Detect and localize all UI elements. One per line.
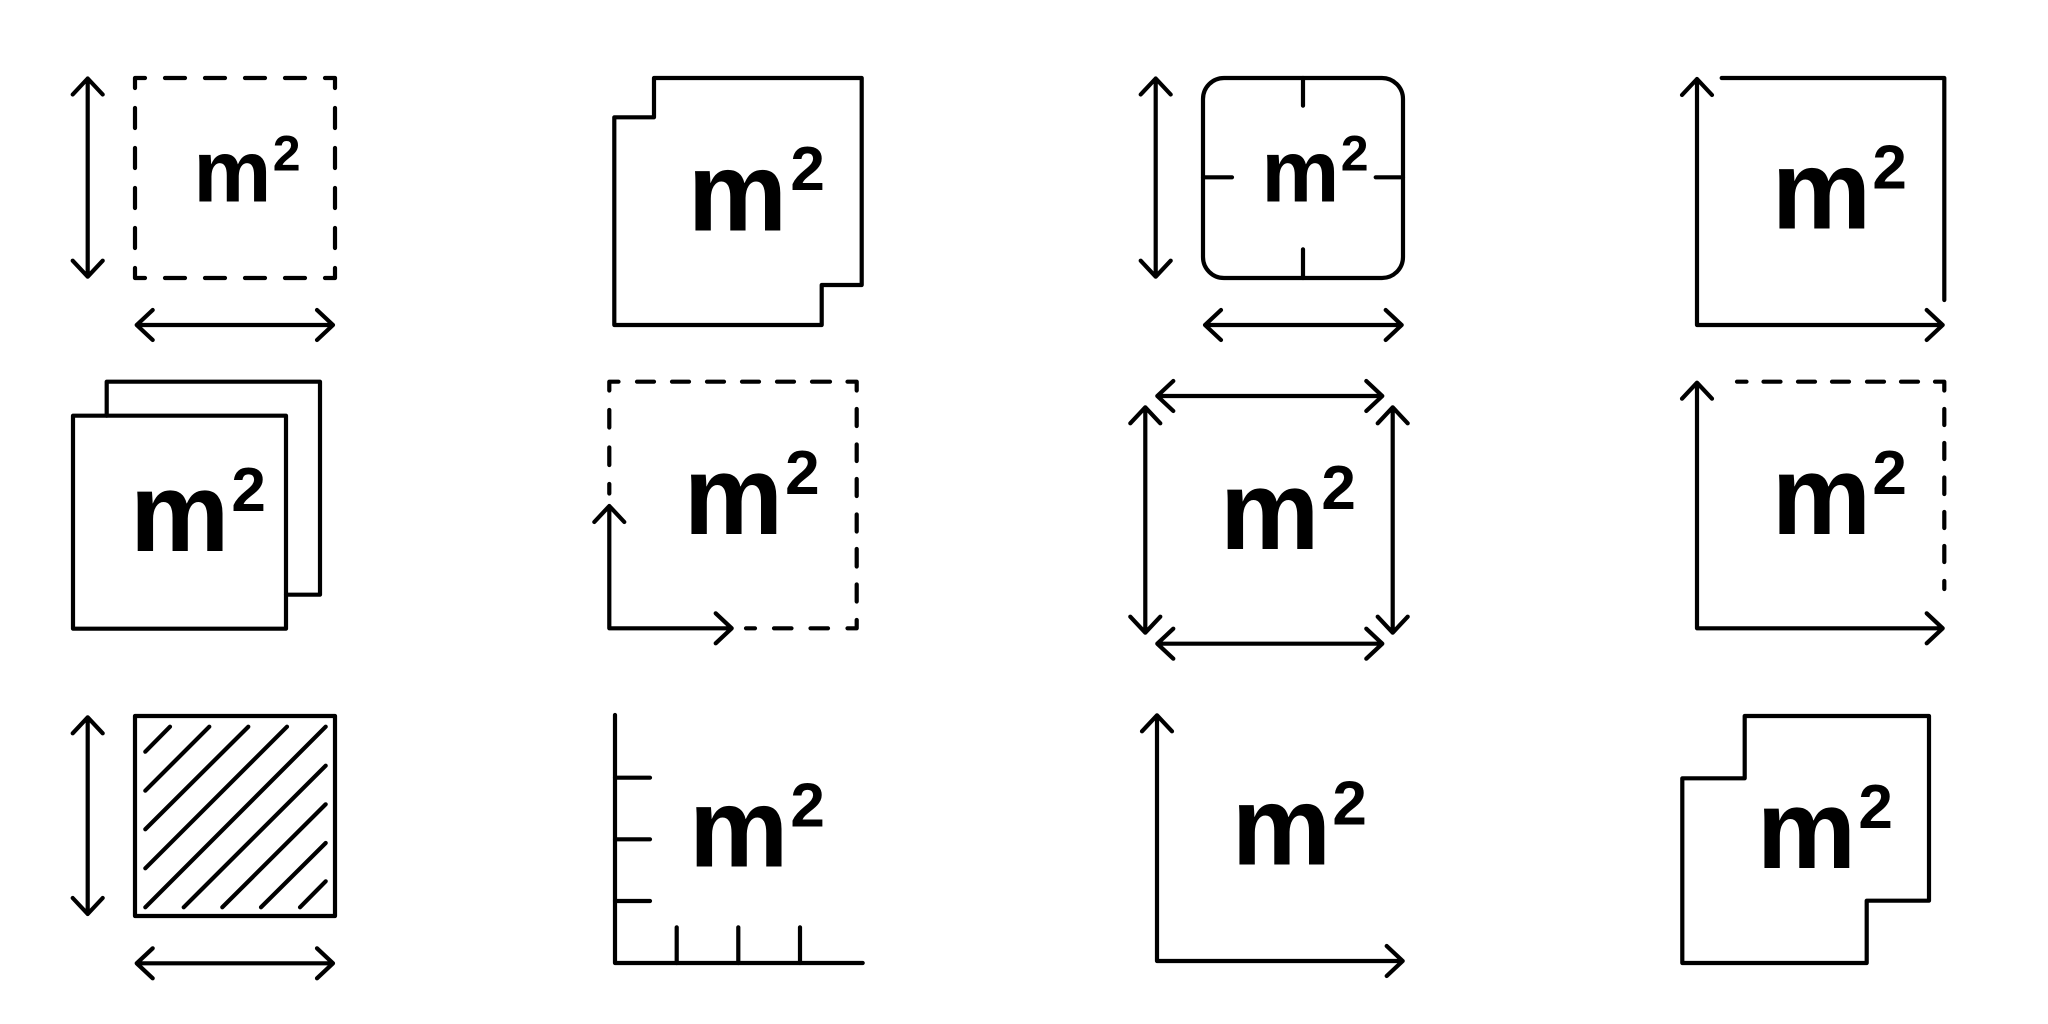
- square: [135, 716, 335, 916]
- label m2: m: [1757, 767, 1856, 892]
- corner arrows: [594, 506, 732, 643]
- centre ticks: [1203, 78, 1403, 278]
- label m2: m: [193, 122, 271, 221]
- label m2: 2: [790, 772, 825, 841]
- axis arrows: [1682, 383, 1943, 643]
- horizontal double arrow: [137, 310, 333, 340]
- rounded square: [1203, 78, 1403, 278]
- label m2: 2: [1858, 773, 1893, 842]
- icon: four double arrows forming a square: [1130, 381, 1408, 659]
- horizontal double arrow: [1205, 310, 1402, 340]
- front square: [73, 416, 286, 629]
- label m2: m: [1261, 122, 1339, 221]
- label m2: 2: [790, 135, 825, 204]
- label m2: 2: [785, 439, 820, 508]
- dashed outline: [609, 382, 857, 628]
- dashed outline: [1737, 382, 1944, 589]
- horizontal double arrow: [137, 948, 333, 978]
- vertical double arrow: [73, 78, 103, 277]
- label m2: 2: [273, 126, 301, 182]
- icon: hatched square with width and height arrows: [73, 716, 335, 978]
- label m2: m: [688, 129, 787, 254]
- label m2: m: [1220, 448, 1319, 573]
- label m2: m: [1772, 127, 1871, 252]
- icon: plain axis arrows: [1142, 715, 1403, 976]
- icon: axis arrows with dashed outline: [1682, 382, 1944, 643]
- floor plan outline: [1682, 716, 1929, 963]
- back square: [107, 382, 320, 595]
- ticks: [615, 778, 800, 963]
- left arrow: [1130, 407, 1160, 633]
- label m2: m: [689, 766, 788, 891]
- diagonal hatching: [145, 727, 326, 907]
- icon: stepped floor plan: [1682, 716, 1929, 963]
- label m2: 2: [1872, 439, 1907, 508]
- label m2: 2: [1321, 454, 1356, 523]
- open outline: [1722, 78, 1944, 300]
- right arrow: [1378, 407, 1408, 633]
- icon: axis arrows with open outline: [1682, 78, 1944, 340]
- floor plan outline: [614, 78, 862, 325]
- label m2: 2: [1872, 133, 1907, 202]
- label m2: m: [684, 433, 783, 558]
- label m2: m: [1232, 764, 1331, 889]
- vertical double arrow: [73, 717, 103, 914]
- icon: ruler axes with ticks: [615, 715, 863, 963]
- icon: dashed square with corner arrows: [594, 382, 857, 643]
- icon: dashed square with width and height arrows: [73, 78, 335, 340]
- dashed square: [135, 78, 335, 278]
- label m2: 2: [1341, 126, 1369, 182]
- label m2: m: [130, 450, 229, 575]
- label m2: m: [1772, 433, 1871, 558]
- label m2: 2: [231, 456, 266, 525]
- bottom arrow: [1157, 629, 1382, 659]
- axis arrows: [1142, 715, 1403, 976]
- axis arrows: [1682, 79, 1943, 340]
- icon: two stacked squares: [73, 382, 320, 629]
- top arrow: [1157, 381, 1382, 411]
- label m2: 2: [1332, 770, 1367, 839]
- icon: notched floor plan: [614, 78, 862, 325]
- vertical double arrow: [1141, 78, 1171, 277]
- axes: [615, 715, 863, 963]
- icon: rounded square with ticks and arrows: [1141, 78, 1403, 340]
